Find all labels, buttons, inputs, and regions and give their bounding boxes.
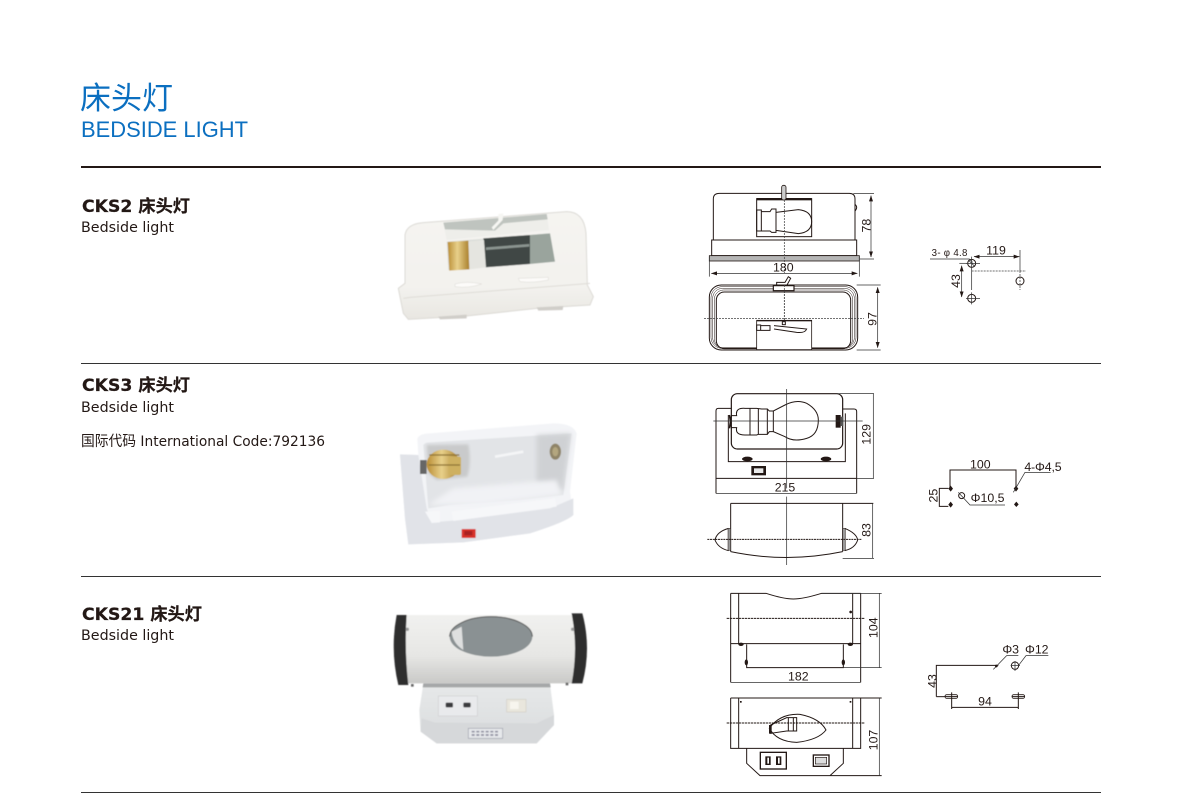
drawing: CKS2 mounting holes: 3- φ 4.8: [932, 248, 967, 259]
heading: CKS2: [81, 196, 190, 236]
drawing: CKS3 mounting holes: [926, 458, 1062, 508]
heading: CKS21: [81, 604, 202, 644]
drawing: CKS21 side and top views: 104: [867, 617, 881, 638]
international code: 国际代码 International Code:792136: [81, 433, 325, 450]
drawing: CKS3 mounting holes: 4-Φ4,5: [1024, 460, 1062, 474]
drawing: CKS2 side and top views: 180: [773, 261, 794, 275]
heading: CKS2: CKS2 床头灯: [82, 196, 190, 217]
heading: CKS3: [81, 375, 190, 416]
drawing: CKS2 side and top views: [704, 185, 881, 350]
title: BEDSIDE LIGHT: [81, 117, 248, 142]
photo: CKS21 lamp: [394, 613, 587, 743]
heading: CKS3: Bedside light: [81, 400, 174, 416]
drawing: CKS3 front and top views: [707, 389, 874, 565]
drawing: CKS3 front and top views: 83: [860, 523, 874, 537]
drawing: CKS2 mounting holes: 43: [949, 274, 963, 288]
drawing: CKS3 mounting holes: 100: [970, 458, 991, 472]
drawing: CKS21 mounting holes: [925, 642, 1049, 709]
drawing: CKS2 mounting holes: [930, 244, 1026, 304]
drawing: CKS21 side and top views: 182: [788, 669, 809, 683]
heading: CKS2: Bedside light: [81, 220, 174, 236]
drawing: CKS3 front and top views: 215: [775, 480, 795, 494]
photo: CKS2 lamp: [398, 212, 593, 319]
drawing: CKS3 mounting holes: 25: [926, 489, 940, 503]
photo: CKS3 lamp: [400, 423, 577, 544]
panel: CKS2: [81, 185, 1026, 350]
drawing: CKS3 front and top views: 129: [860, 424, 874, 445]
drawing: CKS21 mounting holes: Φ3: [1002, 642, 1019, 656]
title: [80, 81, 248, 142]
panel: CKS21: [81, 593, 1049, 776]
drawing: CKS3 mounting holes: Φ10,5: [971, 491, 1005, 505]
drawing: CKS2 side and top views: 78: [859, 219, 873, 233]
drawing: CKS2 mounting holes: 119: [986, 244, 1006, 258]
heading: CKS21: Bedside light: [81, 628, 174, 644]
drawing: CKS21 mounting holes: Φ12: [1025, 642, 1049, 656]
drawing: CKS21 mounting holes: 94: [978, 694, 992, 708]
title: 床头灯: [80, 81, 173, 116]
panel: CKS3: [81, 375, 1062, 565]
drawing: CKS21 side and top views: [727, 593, 882, 776]
heading: CKS21: CKS21 床头灯: [82, 604, 202, 625]
drawing: CKS21 side and top views: 107: [867, 730, 881, 750]
heading: CKS3: CKS3 床头灯: [82, 375, 190, 396]
drawing: CKS21 mounting holes: 43: [925, 674, 939, 688]
drawing: CKS2 side and top views: 97: [865, 312, 879, 326]
